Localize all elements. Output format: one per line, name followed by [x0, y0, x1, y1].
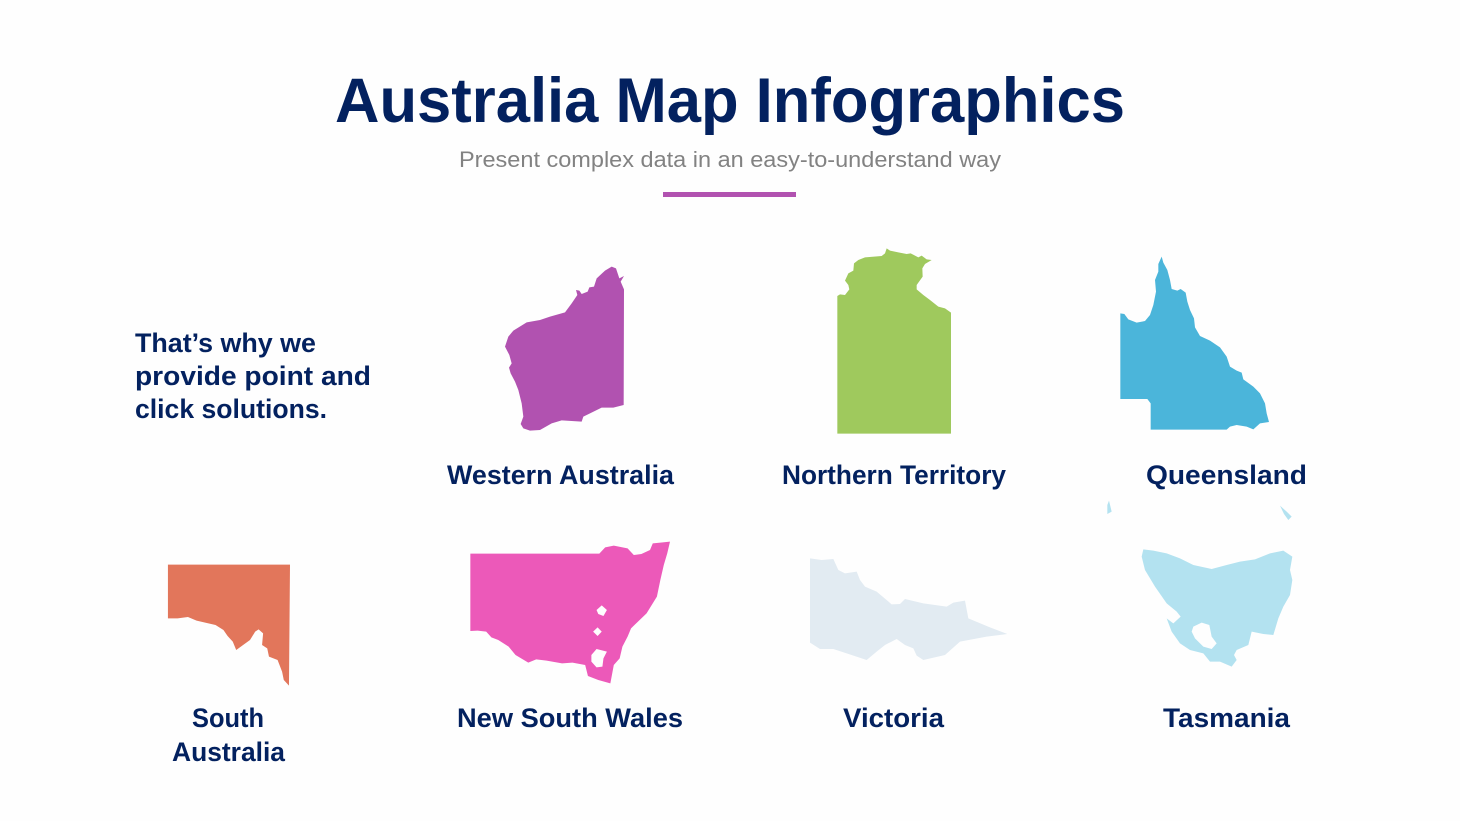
map: South Australia: [168, 565, 290, 686]
label: Victoria: Victoria: [843, 703, 945, 733]
intro text block: click solutions.: [135, 394, 327, 424]
label: South Australia: [172, 703, 286, 767]
map: Western Australia: [505, 267, 624, 431]
label: South Australia: Australia: [172, 737, 286, 767]
intro text block: provide point and: [135, 361, 371, 391]
map: Tasmania: [1107, 501, 1292, 667]
title: Australia Map Infographics: [335, 66, 1125, 136]
label: Northern Territory: Northern Territory: [782, 460, 1006, 490]
label: New South Wales: New South Wales: [457, 703, 683, 733]
label: Queensland: Queensland: [1146, 460, 1307, 490]
label: Western Australia: Western Australia: [447, 460, 675, 490]
subtitle: Present complex data in an easy-to-understand way: [459, 147, 1001, 172]
intro text block: That’s why we: [135, 328, 316, 358]
map: Queensland: [1120, 257, 1269, 430]
label: South Australia: South: [192, 703, 264, 733]
map: Victoria: [810, 558, 1007, 660]
label: Tasmania: Tasmania: [1163, 703, 1291, 733]
intro text block: [135, 328, 371, 424]
map: Northern Territory: [837, 248, 951, 434]
map: New South Wales: [470, 542, 670, 683]
title accent bar: [663, 192, 796, 197]
